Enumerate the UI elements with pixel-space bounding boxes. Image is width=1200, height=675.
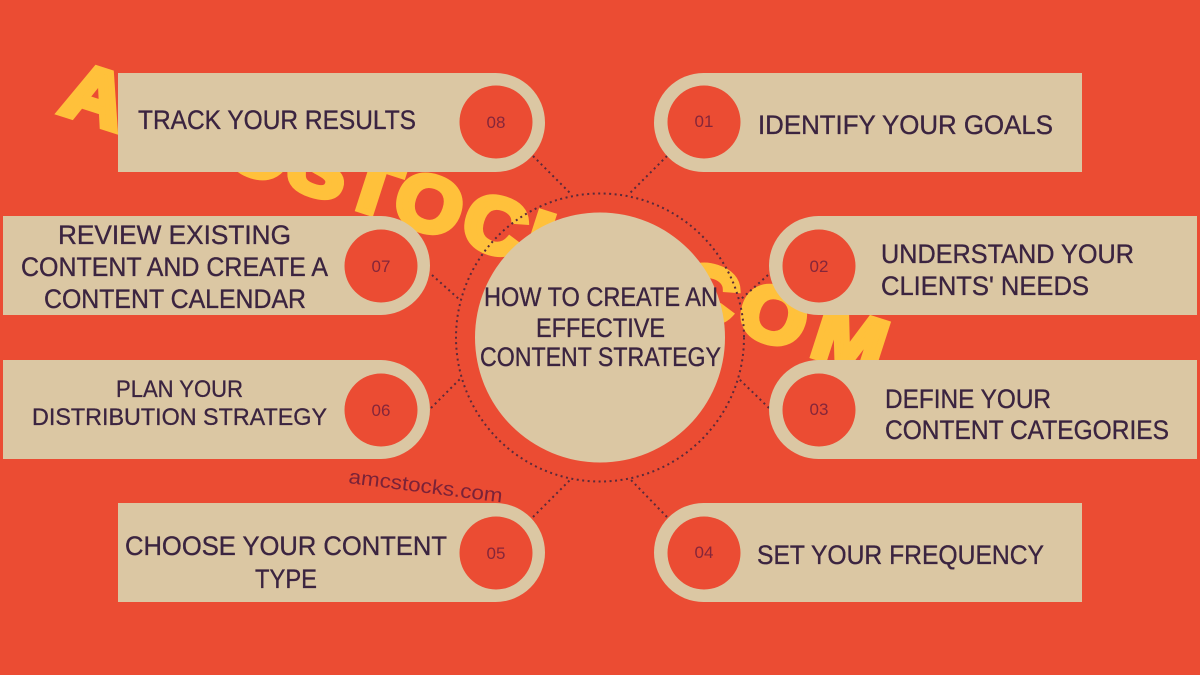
panel: step 01: IDENTIFY YOUR GOALS <box>758 110 1053 140</box>
panel: step 05: 05 <box>487 544 505 563</box>
title: CONTENT STRATEGY <box>480 342 721 372</box>
panel: step 04: 04 <box>695 543 713 562</box>
panel: step 01 <box>654 73 1082 172</box>
panel: step 02: UNDERSTAND YOUR <box>881 239 1134 269</box>
panel: step 01: 01 <box>695 112 713 131</box>
watermark: small site name: amcstocks.com <box>347 466 504 507</box>
panel: step 07 <box>3 216 430 315</box>
panel: step 08 <box>118 73 545 172</box>
panel: step 05: TYPE <box>255 564 317 594</box>
panel: step 06: 06 <box>372 401 390 420</box>
centre circle with title <box>475 212 725 462</box>
panel: step 06 <box>3 360 430 459</box>
panel: step 05 <box>118 503 545 602</box>
dotted connector lines <box>431 156 769 517</box>
panel: step 03 <box>769 360 1197 459</box>
title: EFFECTIVE <box>536 313 665 343</box>
title: HOW TO CREATE AN <box>484 282 718 312</box>
panel: step 07: REVIEW EXISTING <box>58 220 291 250</box>
panel: step 07: CONTENT AND CREATE A <box>21 252 328 282</box>
panel: step 08: TRACK YOUR RESULTS <box>138 105 416 135</box>
panel: step 03: CONTENT CATEGORIES <box>885 415 1169 445</box>
watermark: large diagonal site name: AMCSTOCKS.COM <box>53 46 897 393</box>
panel: step 04 <box>654 503 1082 602</box>
panel: step 03: DEFINE YOUR <box>885 384 1051 414</box>
dotted ring around centre <box>456 194 744 482</box>
title <box>480 282 721 372</box>
panel: step 07: CONTENT CALENDAR <box>44 284 306 314</box>
panel: step 03: 03 <box>810 400 828 419</box>
panel: step 06: DISTRIBUTION STRATEGY <box>32 404 327 431</box>
panel: step 07: 07 <box>372 257 390 276</box>
panel: step 02: 02 <box>810 257 828 276</box>
panel: step 06: PLAN YOUR <box>116 376 243 403</box>
panel: step 02 <box>769 216 1197 315</box>
panel: step 08: 08 <box>487 113 505 132</box>
panel: step 05: CHOOSE YOUR CONTENT <box>125 531 447 561</box>
panel: step 04: SET YOUR FREQUENCY <box>757 540 1044 570</box>
panel: step 02: CLIENTS' NEEDS <box>881 271 1089 301</box>
